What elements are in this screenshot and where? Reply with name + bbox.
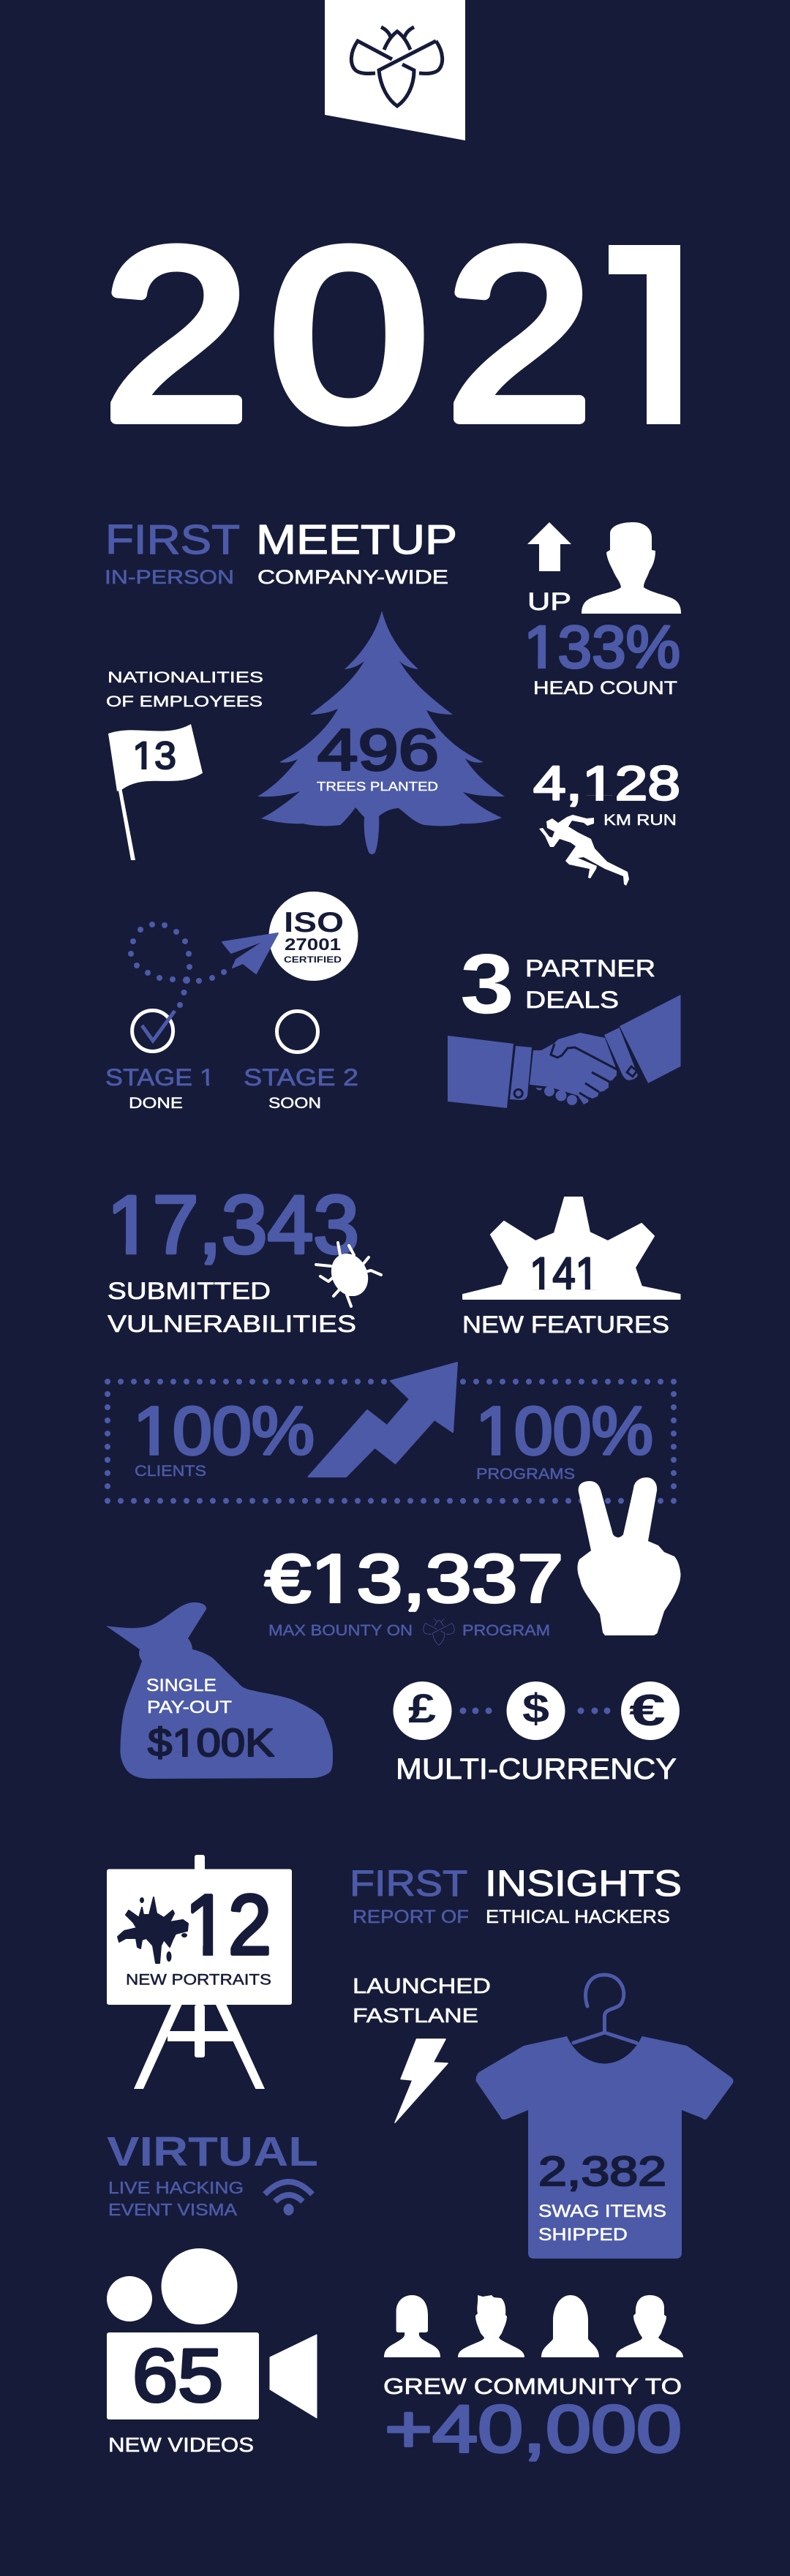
icon: small logo [424,1619,454,1645]
logo banner [325,0,465,140]
label: stage 1 done: STAGE 1 [105,1064,214,1091]
label: stage 2 soon: STAGE 2 [244,1064,358,1091]
icon: lightning bolt [395,2039,448,2123]
icon: money bag single pay-out: $100K [148,1721,274,1765]
stat: 3 partner deals: PARTNER [525,955,655,982]
icon: stage 1 checked circle [132,1011,175,1052]
label: stage 2 soon: SOON [268,1095,321,1112]
label: nationalities of employees: NATIONALITIES [108,669,263,686]
stat: 3 partner deals: DEALS [525,987,619,1013]
heading: first insights report: ETHICAL HACKERS [486,1907,670,1927]
label: virtual live hacking event visma [107,2128,318,2219]
heading: meetup company-wide: MEETUP [256,516,457,563]
icon: pine tree with 496 trees planted: 496 [317,717,439,782]
heading: first insights report [350,1863,682,1927]
icon: t-shirt with swag items [475,2036,733,2259]
icon: easel with 12 new portraits [107,1855,292,2089]
heading: first insights report: INSIGHTS [485,1863,682,1904]
icon: dotted flight path [128,922,227,1008]
stat: €13,337 max bounty [265,1540,563,1639]
icon: t-shirt with swag items: SWAG ITEMS [538,2202,666,2221]
label: virtual live hacking event visma: EVENT VISMA [108,2200,238,2219]
icon: ISO 27001 certified badge [269,892,358,981]
icon: flag with 13: 13 [132,734,176,777]
label: nationalities of employees [106,669,263,710]
heading: first insights report: REPORT OF [353,1907,469,1927]
stat: grew community to +40,000: +40,000 [385,2392,682,2466]
heading: first in-person [105,516,240,588]
icon: handshake [448,995,680,1108]
icon: ISO 27001 certified badge: ISO [284,907,344,938]
icon: paper plane [222,933,278,973]
icon: easel with 12 new portraits: 12 [185,1878,271,1973]
stat: 100% clients: CLIENTS [135,1463,206,1480]
stat: €13,337 max bounty: €13,337 [265,1540,563,1616]
icon: video camera with 65 [107,2248,317,2419]
stat: 100% clients: 100% [133,1393,315,1469]
icon: video camera with 65: 65 [132,2334,223,2417]
label: stage 2 soon [244,1064,358,1112]
label: launched fastlane: FASTLANE [353,2004,478,2027]
label: launched fastlane: LAUNCHED [353,1975,491,1998]
label: nationalities of employees: OF EMPLOYEES [106,693,263,710]
heading: first in-person: IN-PERSON [105,566,234,588]
title: 2021: 0 [269,199,429,471]
icon: gear with 141: 141 [530,1249,598,1298]
icon: person silhouette [582,522,681,614]
icon: dollar coin: $ [522,1685,549,1731]
icon: euro coin [621,1681,680,1740]
label: stage 1 done: DONE [129,1095,183,1112]
icon: community people [384,2295,683,2357]
icon: stage 2 empty circle [276,1011,317,1052]
icon: t-shirt with swag items: SHIPPED [538,2225,628,2245]
label: new videos: NEW VIDEOS [108,2433,254,2456]
stat: 17,343 submitted vulnerabilities: VULNERABILITIES [108,1311,356,1337]
stat: grew community to +40,000 [383,2373,682,2466]
stat: 4,128 km run [533,756,680,829]
icon: peace hand [577,1477,680,1635]
stat: 4,128 km run: KM RUN [603,812,677,829]
stat: 17,343 submitted vulnerabilities: SUBMITTED [108,1278,271,1304]
icon: dollar coin [506,1681,565,1740]
label: virtual live hacking event visma: LIVE HACKING [108,2178,244,2197]
title: 2021: 1 [589,199,730,471]
label: new features: NEW FEATURES [462,1311,669,1338]
icon: easel with 12 new portraits: NEW PORTRAITS [126,1972,271,1988]
icon: gear with 141 [463,1197,680,1299]
stat: head count up 133%: 133% [524,614,680,680]
icon: bug [316,1243,381,1306]
heading: meetup company-wide [256,516,457,588]
icon: pine tree with 496 trees planted [257,611,505,854]
heading: meetup company-wide: COMPANY-WIDE [257,566,448,588]
title: 2021: 2 [103,199,249,471]
heading: first in-person: FIRST [105,516,240,563]
dots between coins [459,1707,610,1714]
icon: ISO 27001 certified badge: CERTIFIED [284,954,342,965]
stat: 17,343 submitted vulnerabilities [107,1179,359,1337]
stat: 100% programs: PROGRAMS [476,1466,575,1483]
stat: 3 partner deals [460,936,655,1031]
icon: hanger [573,1975,636,2043]
title: 2021 [110,243,680,427]
icon: money bag single pay-out [106,1603,333,1779]
icon: wifi [265,2182,312,2215]
stat: €13,337 max bounty: PROGRAM [462,1622,550,1639]
icon: rising arrow [309,1363,457,1477]
icon: flag with 13 [108,724,203,860]
icon: money bag single pay-out: SINGLE [146,1676,217,1695]
stat: head count up 133%: HEAD COUNT [533,678,677,698]
icon: pound coin: £ [408,1685,436,1731]
icon: pound coin [394,1681,452,1740]
icon: money bag single pay-out: PAY-OUT [147,1698,232,1717]
label: stage 1 done [105,1064,214,1112]
stat: grew community to +40,000: GREW COMMUNITY TO [383,2373,682,2399]
icon: pine tree with 496 trees planted: TREES PLANTED [317,779,438,794]
label: launched fastlane [353,1975,491,2027]
heading: first insights report: FIRST [350,1863,467,1904]
icon: t-shirt with swag items: 2,382 [538,2148,666,2195]
stat: 17,343 submitted vulnerabilities: 17,343 [107,1179,359,1270]
icon: euro coin: € [629,1686,666,1735]
icon: runner [539,815,629,886]
icon: up arrow [527,522,571,571]
stat: 3 partner deals: 3 [460,936,514,1031]
icon: ISO 27001 certified badge: 27001 [285,935,341,954]
stat: 100% programs: 100% [475,1393,653,1469]
stat: €13,337 max bounty: MAX BOUNTY ON [268,1622,413,1639]
stat: head count up 133% [524,588,680,698]
label: virtual live hacking event visma: VIRTUAL [107,2128,318,2175]
dotted frame [108,1382,677,1501]
title: 2021: 2 [446,199,592,471]
icon: paint splat [118,1897,188,1963]
infographic canvas [105,0,733,2462]
label: multi-currency: MULTI-CURRENCY [396,1753,677,1785]
stat: head count up 133%: UP [527,588,571,616]
stat: 4,128 km run: 4,128 [533,756,680,810]
